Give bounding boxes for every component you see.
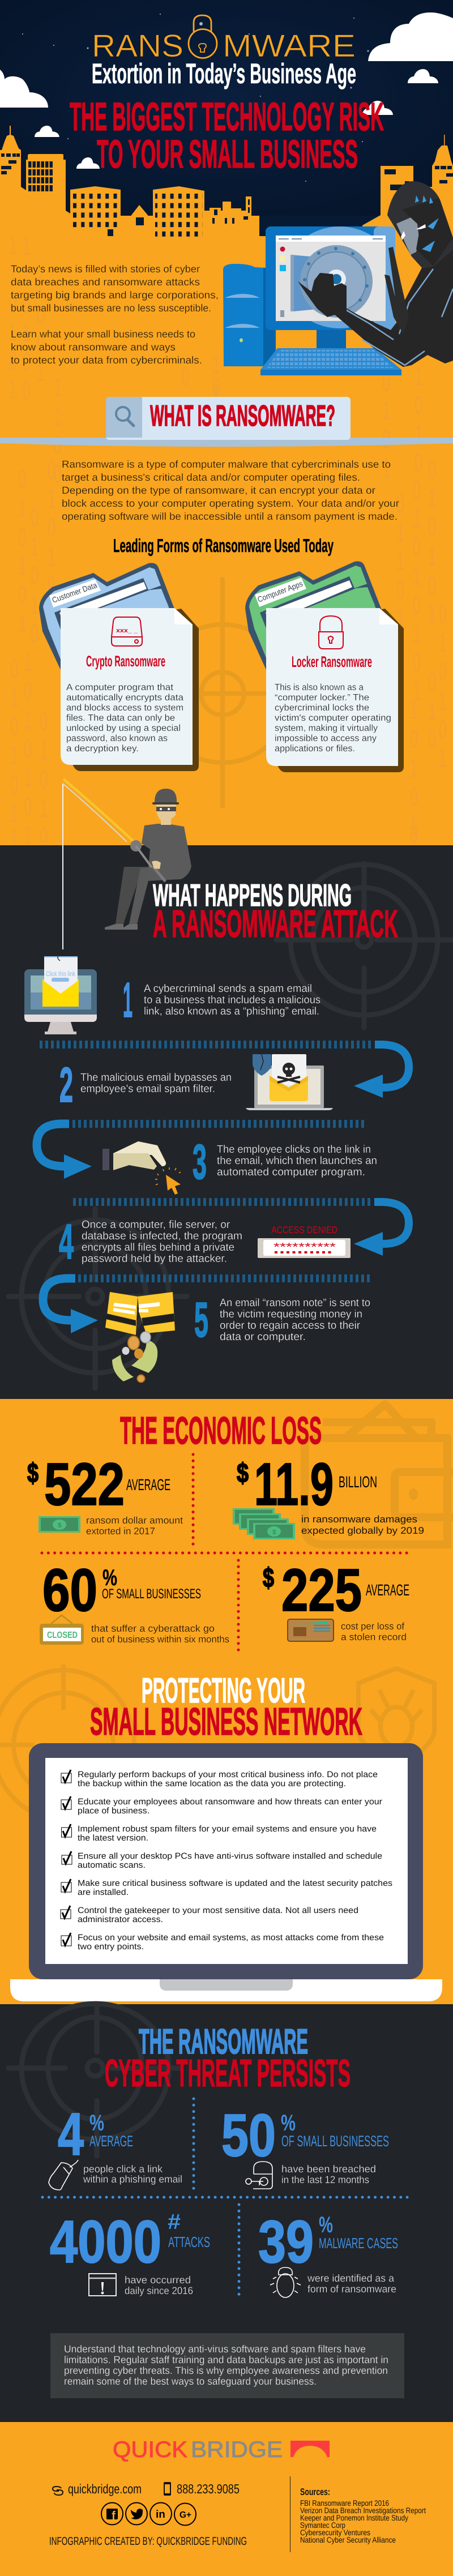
arrow connector 1 to 2: [40, 1045, 409, 1098]
panel: locker ransomware card: applications or files.: [275, 744, 355, 754]
binary digit watermark: 01010: [48, 455, 55, 600]
monitor stand: [317, 330, 346, 349]
illustration: fisherman hacker: [63, 779, 191, 949]
social icons: in: [156, 2509, 165, 2521]
panel: crypto ransomware card: A computer program that: [66, 683, 174, 692]
dotted dividers: [42, 2099, 412, 2296]
panel: crypto ransomware card: [39, 563, 199, 771]
computer tower: [223, 264, 276, 366]
stat: 39 percent: were identified as a: [307, 2273, 395, 2284]
stat: 225 average: AVERAGE: [366, 1581, 409, 1599]
icon: encrypted drive: [112, 617, 142, 646]
panel: crypto ransomware card: Crypto Ransomware: [86, 653, 165, 670]
panel: crypto ransomware card: xxx_ _: [116, 627, 138, 634]
title: Ransomware logo: RANS: [92, 28, 183, 63]
step 4: database is infected, the program: [82, 1230, 242, 1242]
icon: hand clicking cursor: [102, 1141, 181, 1195]
callout: awareness and prevention: limitations. Regular staff training and data backups are just as important in: [64, 2354, 388, 2365]
step 5: data or computer.: [220, 1331, 306, 1343]
step 2: The malicious email bypasses an: [80, 1072, 232, 1084]
panel: crypto ransomware card: automatically encrypts data: [66, 693, 183, 703]
arrow connector 3 to 4: [73, 1202, 409, 1256]
stat: 50 percent: 50: [221, 2102, 276, 2169]
step 5: 5: [194, 1293, 208, 1347]
checklist items: Focus on your website and email systems, as most attacks come from these: [78, 1933, 384, 1942]
step 4: Once a computer, file server, or: [82, 1219, 230, 1231]
step 4: 4: [59, 1214, 74, 1269]
step 5: [105, 1292, 370, 1383]
checklist items: the backup within the same location as the data you are protecting.: [78, 1779, 346, 1788]
vault door: [290, 245, 373, 318]
icon: stack of bills: $: [272, 1528, 276, 1536]
stat: 11.9 billion: $: [237, 1458, 249, 1488]
callout: awareness and prevention: preventing cyber threats. This is why employee awareness and prevention: [64, 2365, 388, 2376]
icon: computer mouse: [49, 2160, 78, 2190]
stars: [22, 14, 397, 182]
step 3: The employee clicks on the link in: [217, 1144, 371, 1156]
icon: padlock and key: [246, 2162, 272, 2189]
icon: link: [53, 2487, 63, 2495]
step 1: to a business that includes a malicious: [144, 994, 320, 1006]
step 1: 1: [123, 973, 133, 1028]
sources list: Verizon Data Breach Investigations Report: [300, 2506, 426, 2515]
binary digit watermark: 01010: [40, 707, 48, 851]
checklist items: Educate your employees about ransomware and how threats can enter your: [78, 1797, 382, 1807]
intro text: Learn what your small business needs to: [11, 328, 195, 340]
stat: 4 percent: %: [89, 2111, 104, 2136]
footer: contact details: 888.233.9085: [177, 2481, 240, 2496]
panel: locker ransomware card: impossible to access any: [275, 734, 377, 743]
intro text: to protect your data from cybercriminals.: [11, 354, 202, 366]
checklist items: Ensure all your desktop PCs have anti-virus software installed and schedule: [78, 1851, 382, 1861]
stat: 11.9 billion: [233, 1451, 424, 1539]
sources list: Keeper and Ponemon Institute Study: [300, 2513, 408, 2522]
callout: awareness and prevention: remain some of the best ways to safeguard your business.: [64, 2376, 317, 2387]
heading: protecting your small business network: [90, 1671, 362, 1743]
intro text: know about ransomware and ways: [11, 341, 176, 353]
stat: 39 percent: form of ransomware: [307, 2283, 396, 2295]
icon: facebook: [106, 2509, 118, 2522]
definition paragraph: Ransomware is a type of computer malware that cybercriminals use to: [62, 459, 391, 470]
stat: 4000 attacks: have occurred: [125, 2274, 191, 2286]
arrow connector 2 to 3: [37, 1124, 364, 1179]
binary digit watermark: 1100: [54, 373, 62, 489]
panel: locker ransomware card: cybercriminal locks the: [275, 703, 369, 713]
checklist items: Regularly perform backups of your most critical business info. Do not place: [78, 1770, 378, 1779]
sources list: FBI Ransomware Report 2016: [300, 2498, 389, 2507]
heading: what happens during a ransomware attack: [153, 878, 398, 945]
binary digit watermark: 1010: [414, 361, 422, 477]
panel: locker ransomware card: Locker Ransomware: [292, 653, 372, 670]
binary digit watermark: 01010101: [413, 474, 421, 706]
panel: locker ransomware card: “computer locker.” The: [275, 693, 369, 703]
binary digit watermark: [9, 202, 447, 853]
panel: crypto ransomware card: password, also known as: [66, 734, 168, 743]
stat: 4000 attacks: 4000: [50, 2209, 161, 2275]
icon: laptop with skull email: [246, 1054, 333, 1110]
icon: closed sign: [40, 1615, 84, 1645]
stat: 50 percent: have been breached: [281, 2163, 376, 2175]
stat: 4 percent: AVERAGE: [89, 2133, 133, 2150]
intro text: data breaches and ransomware attacks: [11, 276, 200, 288]
windows: [1, 153, 453, 237]
definition paragraph: block access to your computer operating system. Your data and/or your: [62, 498, 399, 509]
icon: closed sign: CLOSED: [47, 1631, 78, 1640]
step 4: password held by the attacker.: [82, 1253, 227, 1265]
icon: phone: [164, 2482, 171, 2496]
step 4: [59, 1214, 351, 1269]
stat: 60 percent: %: [102, 1565, 117, 1590]
checklist items: [78, 1770, 392, 1952]
target watermark: [153, 577, 292, 808]
binary digit watermark: 1001: [37, 271, 45, 387]
step 5: the victim requesting money in: [220, 1308, 362, 1320]
dotted dividers: [42, 1454, 411, 1652]
stat: 4000 attacks: #: [168, 2210, 181, 2234]
title: Ransomware logo: [92, 15, 356, 63]
checklist items: Control the gatekeeper to your most sensitive data. Not all users need: [78, 1906, 358, 1915]
step 1: link, also known as a “phishing” email.: [144, 1005, 319, 1017]
definition paragraph: Depending on the type of ransomware, it can encrypt your data or: [62, 485, 375, 496]
footer: quickbridge logo: QUICK: [113, 2437, 187, 2462]
stat: 11.9 billion: expected globally by 2019: [301, 1525, 424, 1536]
checklist items: place of business.: [78, 1806, 149, 1816]
icon: magnifier: [116, 407, 134, 426]
stat: 39 percent: [258, 2209, 398, 2297]
wallet watermark: [305, 1404, 453, 1548]
sources list: [290, 2476, 426, 2552]
stat: 50 percent: [221, 2102, 389, 2189]
fishing line: [62, 784, 63, 949]
binary digit watermark: 010101010: [428, 455, 436, 754]
intro text: Today’s news is filled with stories of cyber: [11, 263, 200, 275]
panel: crypto ransomware card: unlocked by using a special: [66, 724, 181, 733]
binary digit watermark: 101010: [410, 695, 418, 849]
checklist items: administrator access.: [78, 1915, 163, 1924]
icon: dollar bill: [39, 1516, 80, 1533]
panel: crypto ransomware card: and blocks access to system: [66, 703, 183, 713]
intro text: targeting big brands and large corporations,: [11, 289, 219, 301]
binary digit watermark: 110: [212, 350, 220, 408]
intro text: but small businesses are no less susceptible.: [11, 302, 211, 314]
icon: dollar bill: $: [58, 1521, 62, 1529]
folder: [39, 563, 193, 670]
stat: 4000 attacks: daily since 2016: [125, 2285, 193, 2296]
arrow connector 4 to 5: [43, 1278, 370, 1333]
panel: laptop checklist: [10, 1743, 442, 2001]
stat: 225 average: $: [263, 1563, 274, 1593]
stat: 522 average: [27, 1451, 183, 1537]
binary digit watermark: 1010101: [24, 647, 32, 850]
icon: twitter: [131, 2509, 143, 2519]
icon: browser alert window: [89, 2274, 116, 2296]
checklist items: the latest version.: [78, 1833, 148, 1843]
credit line: INFOGRAPHIC CREATED BY: QUICKBRIDGE FUNDING: [49, 2535, 247, 2548]
stat: 4 percent: 4: [58, 2101, 84, 2168]
stat: 225 average: a stolen record: [341, 1632, 407, 1642]
stat: 522 average: 522: [44, 1451, 125, 1518]
icon: access denied password box: [258, 1225, 351, 1258]
folder: Customer Data: [51, 580, 98, 605]
binary digit watermark: 0110101: [9, 202, 17, 404]
icon: access denied password box: **********: [273, 1241, 336, 1253]
social icons: [101, 2502, 196, 2525]
stat: 39 percent: MALWARE CASES: [319, 2235, 398, 2252]
sources list: Symantec Corp: [300, 2521, 345, 2530]
icon: desktop computer with phishing email: [24, 955, 97, 1034]
fishing rod: [63, 779, 135, 842]
sources list: National Cyber Security Alliance: [300, 2535, 396, 2544]
stat: 225 average: 225: [281, 1557, 362, 1624]
icon: torn ransom note with money: [105, 1292, 175, 1383]
binary digit watermark: 010101: [439, 599, 447, 773]
heading: the ransomware cyber threat persists: [105, 2022, 351, 2095]
stat: 39 percent: 39: [258, 2209, 314, 2275]
icon: facebook: f: [112, 2509, 116, 2522]
panel: locker ransomware card: system, making it virtually: [275, 724, 378, 733]
step 5: order to regain access to their: [220, 1320, 361, 1332]
binary digit watermark: 011010: [396, 489, 404, 662]
footer: quickbridge logo: [113, 2437, 330, 2462]
stat: 225 average: cost per loss of: [341, 1621, 404, 1632]
binary digit watermark: 010: [181, 361, 189, 448]
checklist items: are installed.: [78, 1888, 129, 1897]
stat: 60 percent: that suffer a cyberattack go: [91, 1623, 215, 1634]
stat: 50 percent: in the last 12 months: [281, 2174, 369, 2185]
panel: locker ransomware card: This is also known as a: [275, 683, 364, 692]
step 1: [24, 955, 320, 1034]
step 2: 2: [59, 1058, 73, 1112]
panel: crypto ransomware card: files. The data can only be: [66, 713, 175, 723]
keyboard: [260, 348, 401, 375]
step 5: An email “ransom note” is sent to: [220, 1297, 370, 1309]
step 3: automated computer program.: [217, 1166, 365, 1178]
step 2: employee's email spam filter.: [80, 1083, 215, 1095]
panel: locker ransomware card: [245, 561, 404, 772]
sources list: Sources:: [300, 2487, 330, 2497]
panel: cyber threat persists section: [0, 2004, 453, 2422]
target watermarks: [8, 863, 453, 1388]
folder label: [49, 579, 101, 607]
panel: economic loss section: [0, 1399, 453, 2004]
stat: 4000 attacks: ATTACKS: [168, 2233, 210, 2250]
footer: contact details: [53, 2481, 240, 2496]
stat: 4 percent: people click a link: [83, 2163, 163, 2175]
heading: the biggest technology risk: [70, 95, 384, 176]
panel: locker ransomware card: victim's computer operating: [275, 713, 391, 723]
stat: 4000 attacks: [50, 2209, 210, 2296]
target watermark: [8, 2004, 181, 2156]
stat: 60 percent: 60: [42, 1557, 97, 1624]
icon: padlock: [319, 616, 343, 649]
folder: Computer Apps: [256, 579, 304, 604]
stat: 4 percent: [49, 2101, 182, 2190]
icon: bug: [270, 2267, 301, 2297]
stat: 11.9 billion: BILLION: [339, 1473, 377, 1491]
skyline: [0, 126, 453, 238]
icon: credit card: [288, 1619, 334, 1641]
panel: header night sky: [0, 0, 453, 236]
stat: 39 percent: %: [319, 2213, 333, 2237]
stat: 4 percent: within a phishing email: [83, 2173, 182, 2185]
intro text: [11, 263, 219, 366]
step 2: [59, 1054, 333, 1112]
callout: awareness and prevention: [50, 2333, 404, 2398]
stat: 50 percent: %: [281, 2111, 296, 2136]
step 4: encrypts all files behind a private: [82, 1242, 234, 1253]
icon: access denied password box: ACCESS DENIED: [271, 1225, 337, 1235]
icon: padlock letter O: [189, 15, 217, 58]
definition paragraph: [62, 459, 399, 522]
folder: [245, 561, 398, 670]
hacker figure: [298, 181, 453, 367]
panel: dark ransomware attack section: [0, 845, 453, 1399]
step 3: the email, which then launches an: [217, 1155, 377, 1167]
stat: 11.9 billion: 11.9: [254, 1451, 334, 1518]
panel: crypto ransomware card: a decryption key.: [66, 744, 139, 754]
stat: 522 average: $: [27, 1458, 39, 1488]
binary digit watermark: 110100: [23, 231, 31, 405]
search bar heading: what is ransomware: [0, 397, 453, 447]
footer: quickbridge logo: BRIDGE: [191, 2437, 283, 2462]
checklist items: Make sure critical business software is updated and the latest security patches: [78, 1878, 392, 1888]
step 3: 3: [193, 1135, 207, 1189]
stat: 522 average: extorted in 2017: [86, 1526, 155, 1537]
stat: 522 average: AVERAGE: [126, 1476, 170, 1494]
illustration: computer with vault and hacker: [223, 181, 453, 375]
stat: 60 percent: [40, 1557, 229, 1645]
folder label: [255, 577, 306, 607]
binary digit watermark: 010101: [18, 464, 26, 638]
icon: desktop computer with phishing email: Click this link: [46, 970, 76, 978]
binary digit watermark: 0101011: [10, 654, 18, 853]
step 3: [102, 1135, 377, 1195]
title: Ransomware logo: MWARE: [223, 28, 356, 63]
binary digit watermark: 01010: [31, 503, 39, 648]
step 1: A cybercriminal sends a spam email: [144, 983, 312, 995]
target and shield watermark: [0, 1664, 434, 1820]
definition paragraph: target a business's critical data and/or computer operating files.: [62, 472, 360, 483]
binary digit watermark: 0101: [382, 367, 390, 483]
social icons: G+: [180, 2510, 191, 2520]
callout: awareness and prevention: Understand that technology anti-virus software and spam filters have: [64, 2343, 366, 2355]
sources list: Cybersecurity Ventures: [300, 2528, 370, 2537]
stat: 11.9 billion: in ransomware damages: [301, 1514, 417, 1525]
clouds: [0, 12, 453, 169]
checklist items: two entry points.: [78, 1942, 144, 1952]
definition paragraph: operating software will be inaccessible until a ransom payment is made.: [62, 511, 398, 522]
checklist items: Implement robust spam filters for your email systems and ensure you have: [78, 1824, 377, 1834]
stat: 60 percent: out of business within six months: [91, 1634, 229, 1645]
footer: contact details: quickbridge.com: [68, 2481, 142, 2496]
stat: 225 average: [263, 1557, 409, 1642]
stat: 60 percent: OF SMALL BUSINESSES: [102, 1586, 201, 1602]
monitor: [266, 226, 395, 330]
stat: 522 average: ransom dollar amount: [86, 1515, 183, 1526]
checklist items: automatic scans.: [78, 1860, 146, 1870]
icon: stack of bills: [233, 1508, 295, 1539]
checkbox icons: [61, 1770, 72, 1946]
